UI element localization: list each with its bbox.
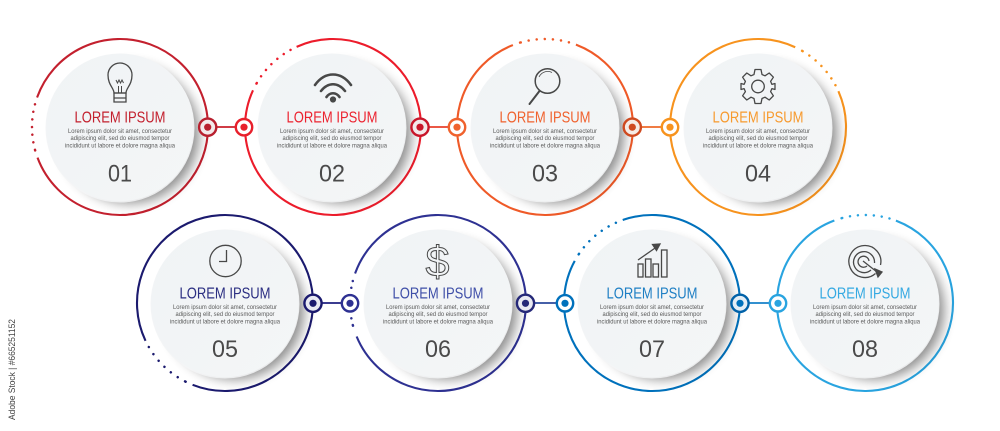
- icon: clock: [210, 245, 241, 277]
- icon: wifi: [315, 74, 351, 102]
- card 05: Lorem ipsum dolor sit amet, consectetur: [173, 304, 278, 311]
- icon: light bulb: [108, 63, 132, 102]
- card 08: 08: [852, 336, 878, 363]
- card 06: incididunt ut labore et dolore magna aliqua: [383, 319, 493, 326]
- card 07: LOREM IPSUM: [606, 286, 698, 302]
- card 08: LOREM IPSUM: [820, 286, 910, 302]
- card 05: [107, 185, 343, 421]
- connector 03 to 04: [624, 119, 678, 136]
- connector 02 to 03: [411, 119, 465, 136]
- card 06: 06: [425, 336, 451, 363]
- card 07: incididunt ut labore et dolore magna aliqua: [597, 319, 707, 326]
- card 01: 01: [108, 160, 132, 188]
- card 01: incididunt ut labore et dolore magna aliqua: [65, 143, 175, 150]
- card 05: LOREM IPSUM: [180, 286, 270, 302]
- card 02: incididunt ut labore et dolore magna aliqua: [277, 143, 387, 150]
- card 06: adipiscing elit, sed do eiusmod tempor: [388, 311, 488, 318]
- icon: growth chart: [638, 244, 667, 277]
- card 02: LOREM IPSUM: [286, 110, 378, 126]
- card 07: adipiscing elit, sed do eiusmod tempor: [602, 311, 702, 318]
- card 05: 05: [212, 336, 238, 363]
- card 05: adipiscing elit, sed do eiusmod tempor: [176, 311, 275, 318]
- card 02: adipiscing elit, sed do eiusmod tempor: [282, 135, 382, 142]
- card 04: incididunt ut labore et dolore magna aliqua: [703, 143, 813, 150]
- card 02: Lorem ipsum dolor sit amet, consectetur: [280, 128, 385, 135]
- card 04: 04: [745, 160, 771, 188]
- card 01: [7, 14, 233, 240]
- card 07: 07: [639, 336, 665, 363]
- connector 07 to 08: [731, 295, 786, 312]
- card 07: Lorem ipsum dolor sit amet, consectetur: [600, 304, 705, 311]
- card 02: 02: [319, 160, 345, 188]
- card 05: incididunt ut labore et dolore magna aliqua: [170, 319, 280, 326]
- card 03: [431, 13, 659, 241]
- card 01: LOREM IPSUM: [74, 110, 166, 126]
- icon: dollar sign: $: [426, 238, 450, 286]
- card 03: 03: [532, 160, 558, 188]
- card 06: [325, 190, 551, 416]
- stock credit: Adobe Stock | #665251152: [7, 319, 17, 420]
- card 08: adipiscing elit, sed do eiusmod tempor: [816, 311, 915, 318]
- card 04: [638, 7, 878, 247]
- card 01: Lorem ipsum dolor sit amet, consectetur: [68, 128, 173, 135]
- card 06: Lorem ipsum dolor sit amet, consectetur: [386, 304, 491, 311]
- card 04: adipiscing elit, sed do eiusmod tempor: [708, 135, 808, 142]
- connector 06 to 07: [517, 295, 573, 312]
- card 06: LOREM IPSUM: [392, 286, 484, 302]
- card 03: LOREM IPSUM: [500, 110, 590, 126]
- card 08: Lorem ipsum dolor sit amet, consectetur: [813, 304, 918, 311]
- card 04: Lorem ipsum dolor sit amet, consectetur: [706, 128, 811, 135]
- card 01: adipiscing elit, sed do eiusmod tempor: [70, 135, 170, 142]
- card 08: incididunt ut labore et dolore magna aliqua: [810, 319, 920, 326]
- card 04: LOREM IPSUM: [712, 110, 804, 126]
- card 02: [213, 7, 453, 247]
- icon: target: [849, 246, 882, 278]
- connector 01 to 02: [199, 119, 252, 136]
- icon: gear: [741, 70, 775, 104]
- connector 05 to 06: [304, 295, 358, 312]
- card 07: [530, 181, 774, 425]
- card 03: incididunt ut labore et dolore magna aliqua: [490, 143, 600, 150]
- card 03: adipiscing elit, sed do eiusmod tempor: [496, 135, 595, 142]
- card 08: [751, 189, 979, 417]
- icon: magnifying glass: [530, 69, 560, 104]
- card 03: Lorem ipsum dolor sit amet, consectetur: [493, 128, 598, 135]
